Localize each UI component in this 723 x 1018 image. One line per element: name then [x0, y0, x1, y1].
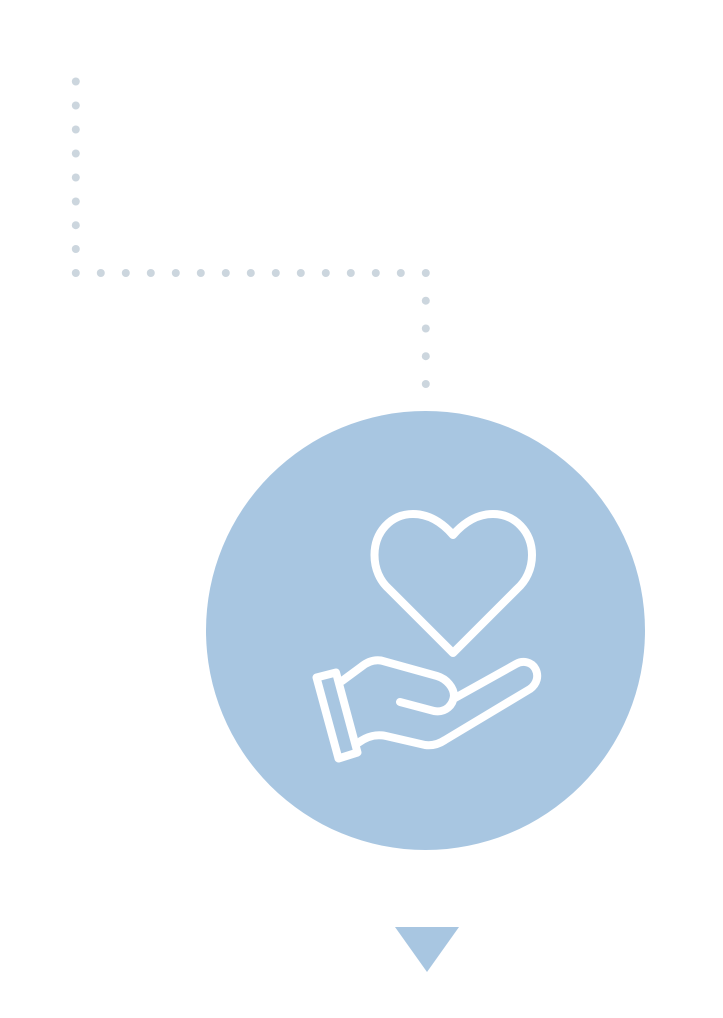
icon: open hand — [342, 660, 537, 745]
dotted connector line — [72, 78, 430, 388]
icon: heart — [374, 514, 532, 653]
icon: sleeve cuff — [316, 672, 358, 758]
blue circle badge — [206, 411, 645, 850]
downward triangle arrow — [395, 927, 459, 972]
icon: heart above open hand — [316, 514, 537, 758]
